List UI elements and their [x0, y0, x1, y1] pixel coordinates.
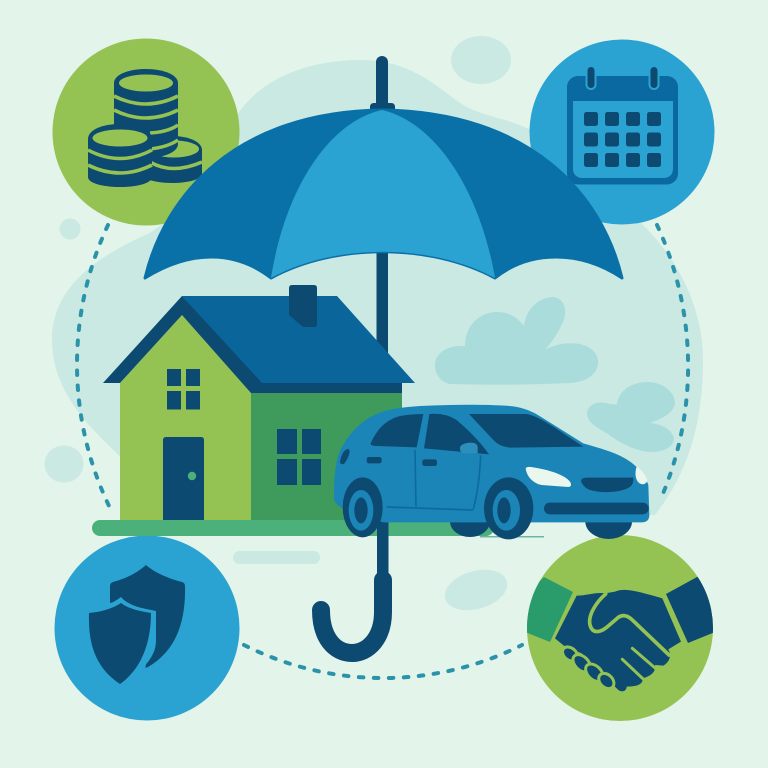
- cloud: small: [587, 382, 675, 452]
- house gable trim: [103, 296, 402, 393]
- car front door window: [424, 414, 489, 454]
- ground strip: [92, 520, 494, 536]
- car side mirror: [460, 443, 478, 453]
- car far tyres: [450, 504, 632, 539]
- car corner light: [635, 467, 647, 484]
- car: [334, 405, 649, 539]
- umbrella top cap: [370, 103, 395, 112]
- umbrella lower shaft: [377, 515, 388, 580]
- icon: coin stacks: [88, 69, 202, 187]
- house chimney: [289, 285, 317, 327]
- panel: calendar circle: [530, 40, 714, 224]
- circle background: calendar: [530, 40, 714, 224]
- panel: shield circle: [54, 536, 240, 720]
- ground shadow line: [480, 536, 544, 538]
- car door handles: [367, 457, 382, 463]
- icon: handshake: [527, 576, 713, 692]
- house attic window: [167, 369, 200, 410]
- car bumper: [544, 503, 649, 514]
- dashed ring: left arc: [77, 225, 110, 508]
- decorative bar under ground: [233, 551, 320, 564]
- umbrella upper shaft: [376, 245, 388, 365]
- car body: [334, 405, 649, 522]
- house roof: [182, 296, 415, 383]
- cloud: large: [435, 297, 598, 385]
- car grille: [581, 478, 633, 492]
- house right wall: [251, 392, 402, 520]
- car door seams: [387, 450, 481, 510]
- background blob: [52, 60, 703, 518]
- umbrella tip: [376, 56, 388, 111]
- house left wall: [120, 315, 251, 520]
- house side window: [277, 429, 321, 485]
- decorative bubble: lower left: [44, 446, 84, 482]
- decorative bubble: lower right: [440, 563, 512, 617]
- car tail light: [340, 449, 350, 464]
- house door: [163, 437, 204, 520]
- door knob: [188, 472, 196, 480]
- icon: double shield: [84, 565, 185, 690]
- dashed ring: bottom arc: [244, 645, 522, 678]
- circle background: shields: [54, 536, 240, 720]
- car rear window: [371, 414, 423, 447]
- car front wheel: [484, 477, 533, 539]
- panel: coins circle: [52, 38, 240, 226]
- house: [103, 285, 415, 520]
- circle background: handshake: [527, 535, 713, 721]
- circle background: coins: [52, 38, 240, 226]
- car headlight: [526, 467, 571, 487]
- umbrella hook handle: [321, 580, 383, 653]
- infographic canvas: [44, 36, 714, 721]
- icon: calendar: [567, 65, 678, 184]
- car rear wheel: [343, 477, 383, 537]
- panel: handshake circle: [520, 535, 720, 721]
- decorative bubble: upper left: [60, 218, 80, 240]
- car windshield: [469, 414, 583, 448]
- dashed ring: right arc: [657, 225, 688, 496]
- decorative bubble: top right: [451, 36, 511, 84]
- umbrella canopy: [145, 110, 622, 278]
